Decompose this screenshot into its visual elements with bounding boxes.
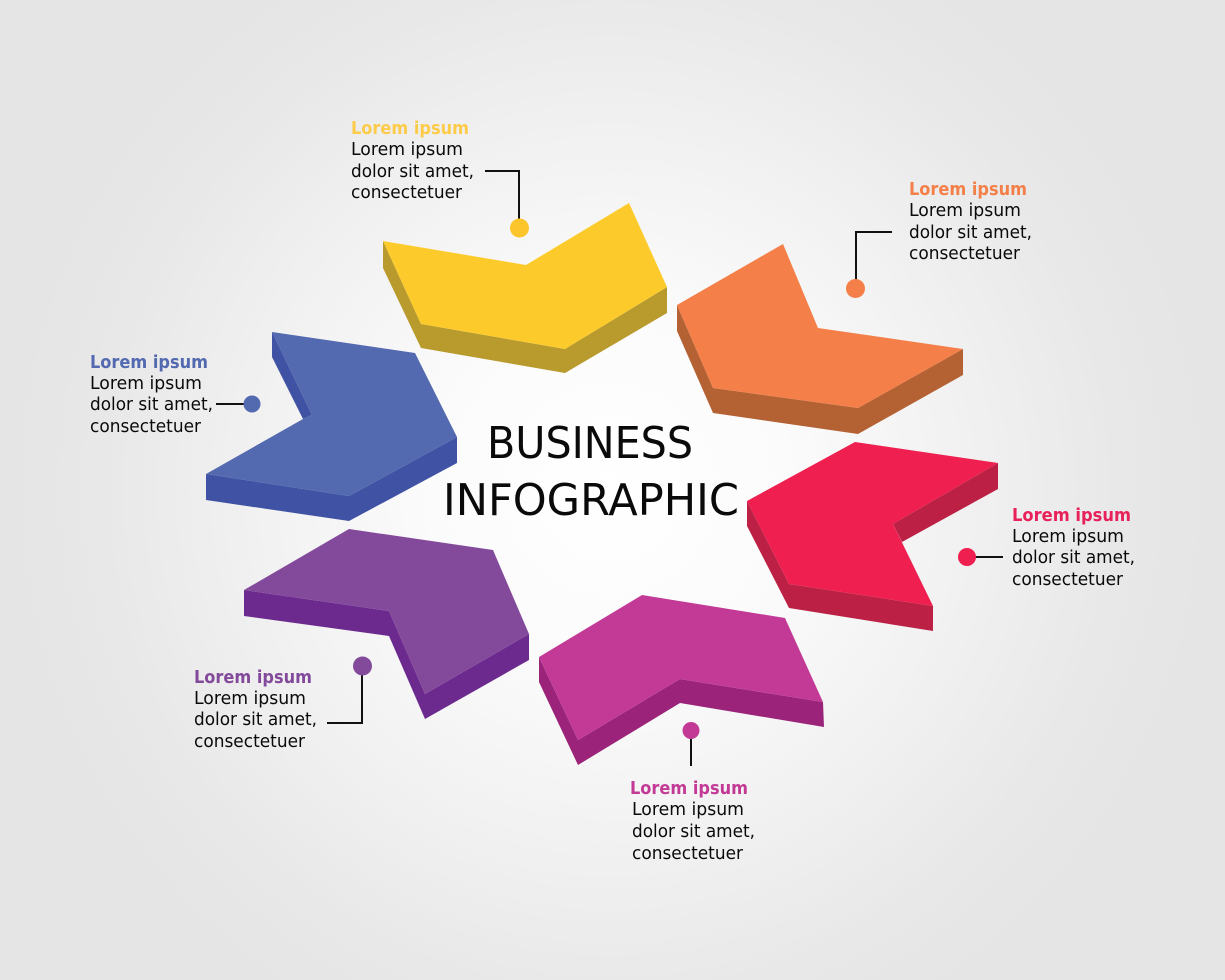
red text block: dolor sit amet, — [1012, 547, 1135, 568]
panel: yellow segment — [351, 118, 667, 373]
magenta text block: Lorem ipsum — [630, 778, 748, 799]
orange text block: Lorem ipsum — [909, 179, 1027, 200]
blue text block: consectetuer — [90, 416, 202, 437]
purple text block: dolor sit amet, — [194, 709, 317, 730]
yellow text block: Lorem ipsum — [351, 118, 469, 139]
orange text block: Lorem ipsum — [909, 200, 1021, 221]
purple text block: Lorem ipsum — [194, 688, 306, 709]
orange text block: dolor sit amet, — [909, 222, 1032, 243]
purple text block: Lorem ipsum — [194, 667, 312, 688]
orange text block — [909, 179, 1032, 264]
panel: purple segment — [194, 529, 529, 752]
red text block: consectetuer — [1012, 569, 1124, 590]
title: INFOGRAPHIC — [443, 475, 739, 526]
orange text block: consectetuer — [909, 243, 1021, 264]
purple text block: consectetuer — [194, 731, 306, 752]
blue text block — [90, 352, 213, 437]
yellow text block: Lorem ipsum — [351, 139, 463, 160]
title — [443, 418, 739, 526]
purple text block — [194, 667, 317, 752]
yellow arrow block — [383, 203, 667, 373]
red text block: Lorem ipsum — [1012, 526, 1124, 547]
magenta text block: consectetuer — [632, 843, 744, 864]
orange connector and dot — [846, 232, 892, 298]
panel: red segment — [747, 442, 1135, 631]
magenta text block: dolor sit amet, — [632, 821, 755, 842]
red arrow block — [747, 442, 998, 631]
yellow text block: consectetuer — [351, 182, 463, 203]
title: BUSINESS — [487, 418, 693, 469]
panel: orange segment — [677, 179, 1032, 434]
panel: magenta segment — [539, 595, 824, 864]
red text block: Lorem ipsum — [1012, 505, 1131, 526]
yellow text block: dolor sit amet, — [351, 161, 474, 182]
blue arrow block — [206, 332, 457, 521]
blue text block: Lorem ipsum — [90, 352, 208, 373]
yellow connector and dot — [485, 171, 529, 238]
magenta connector and dot — [682, 722, 700, 766]
red text block — [1012, 505, 1135, 590]
yellow text block — [351, 118, 474, 203]
blue text block: Lorem ipsum — [90, 373, 202, 394]
blue text block: dolor sit amet, — [90, 394, 213, 415]
red connector and dot — [958, 548, 1003, 566]
magenta arrow block — [539, 595, 824, 765]
blue connector and dot — [216, 396, 260, 412]
purple connector and dot — [327, 656, 372, 723]
magenta text block — [630, 778, 755, 864]
purple arrow block — [244, 529, 529, 719]
magenta text block: Lorem ipsum — [632, 799, 744, 820]
panel: blue segment — [90, 332, 457, 521]
orange arrow block — [677, 244, 963, 434]
